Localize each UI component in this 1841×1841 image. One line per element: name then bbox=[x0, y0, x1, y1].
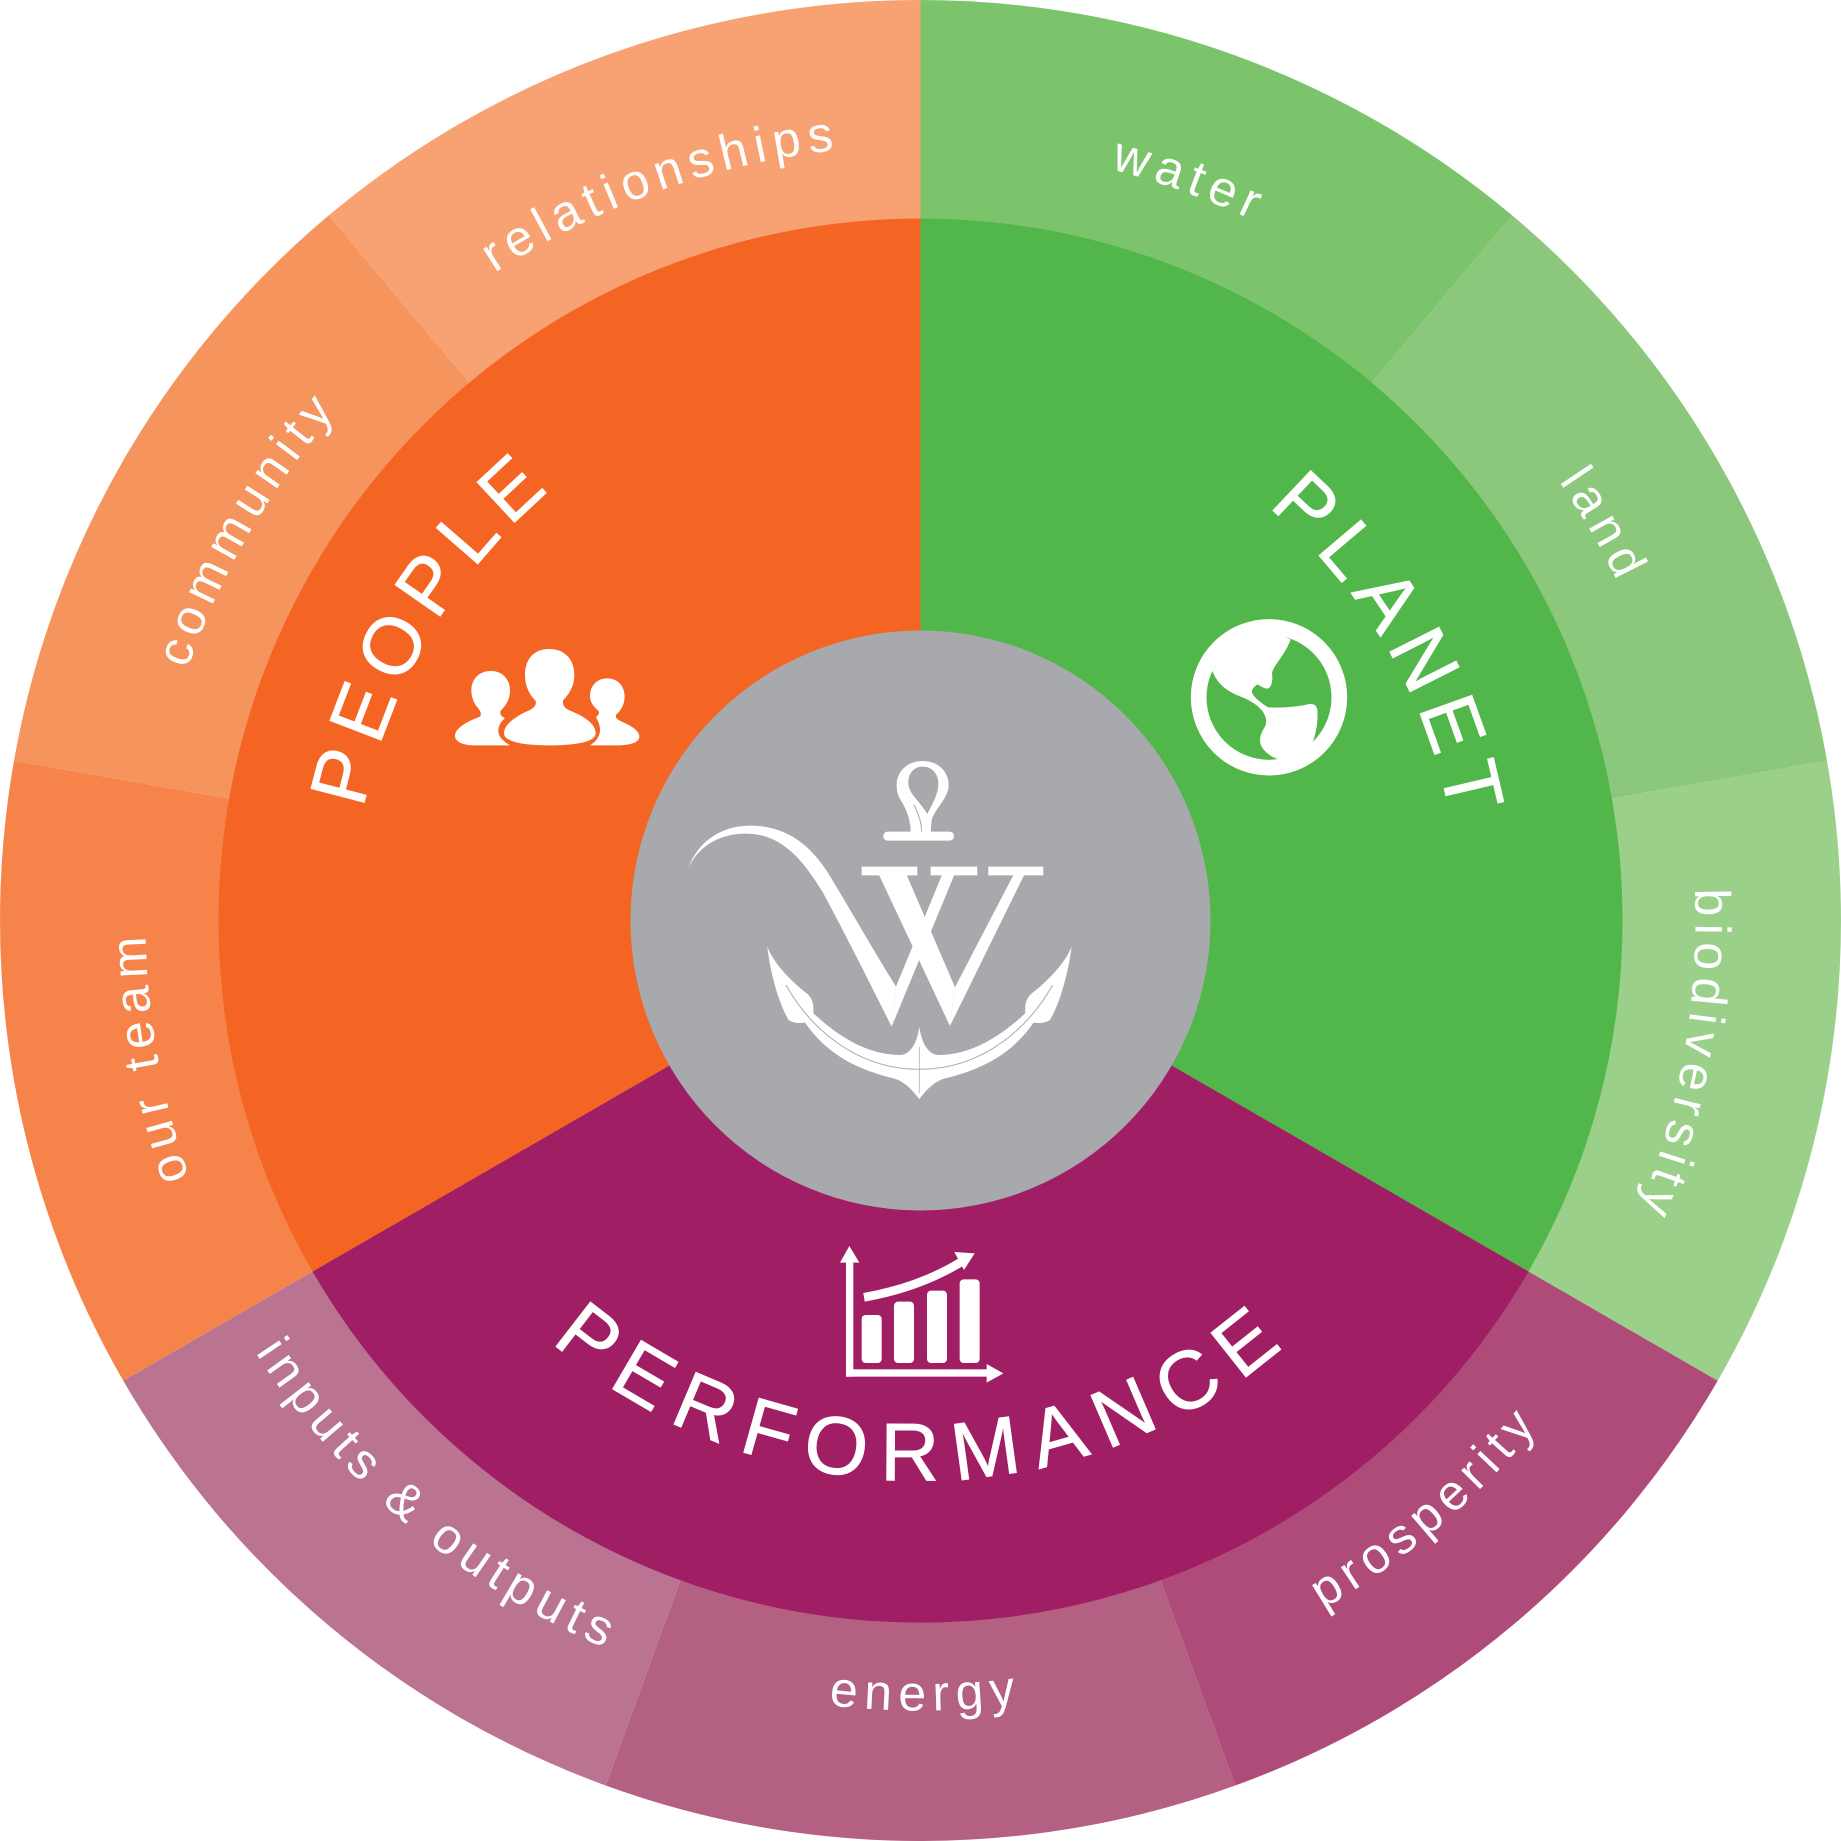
inner ring: performance bbox=[312, 920, 1528, 1623]
label: relationships: relationships bbox=[483, 124, 832, 272]
centre circle bbox=[630, 630, 1210, 1210]
label: prosperity: prosperity bbox=[1312, 1410, 1534, 1616]
inner ring: people bbox=[218, 218, 920, 1271]
logo: anchor W bbox=[688, 761, 1072, 1099]
icon: people bbox=[455, 649, 639, 745]
label: land: land bbox=[1560, 464, 1648, 578]
label: energy: energy bbox=[832, 1678, 1014, 1720]
label: community: community bbox=[166, 396, 332, 664]
icon: bar chart bbox=[840, 1246, 1003, 1383]
label: biodiversity: biodiversity bbox=[1637, 892, 1732, 1218]
label: inputs & outputs: inputs & outputs bbox=[257, 1335, 611, 1645]
heading: PEOPLE: PEOPLE bbox=[310, 453, 547, 803]
anchor bar bbox=[883, 832, 954, 841]
label: our team: our team bbox=[119, 939, 186, 1181]
inner ring: planet bbox=[920, 218, 1623, 1272]
anchor ring bbox=[897, 761, 949, 832]
heading: PLANET: PLANET bbox=[1272, 470, 1504, 804]
anchor flukes bbox=[767, 947, 1072, 1099]
icon: globe bbox=[1199, 627, 1339, 768]
heading: PERFORMANCE: PERFORMANCE bbox=[555, 1301, 1282, 1481]
W letter with swoosh bbox=[688, 826, 1043, 1027]
label: water: water bbox=[1118, 143, 1262, 216]
